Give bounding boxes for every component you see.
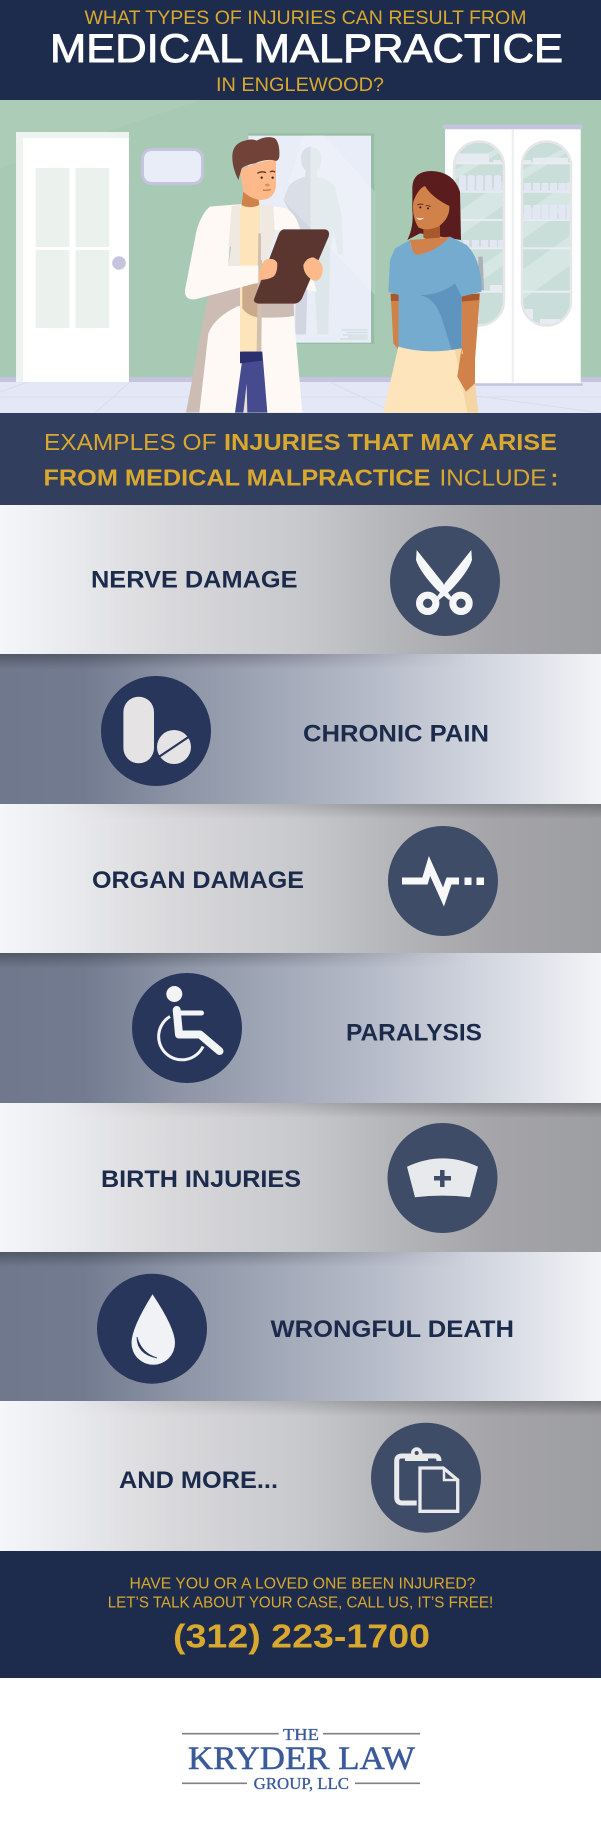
banner text line 1: EXAMPLES OF: [44, 429, 216, 455]
label: BIRTH INJURIES: [101, 1166, 301, 1193]
icon: clipboard and document: [371, 1423, 481, 1533]
anatomy poster: [248, 133, 375, 344]
row: paralysis: [0, 953, 601, 1103]
row: wrongful death: [0, 1252, 601, 1401]
logo: the kryder law group: KRYDER LAW: [188, 1741, 416, 1777]
row: chronic pain: [0, 654, 601, 804]
icon: pills: [101, 676, 211, 786]
baseboard: [0, 377, 601, 382]
banner text line 1: [44, 429, 557, 455]
row: nerve damage: [0, 505, 601, 654]
row: and more: [0, 1401, 601, 1551]
icon: scissors: [390, 526, 500, 636]
title: medical malpractice: MEDICAL MALPRACTICE: [50, 27, 563, 71]
label: WRONGFUL DEATH: [270, 1316, 514, 1343]
call to action line 1: HAVE YOU OR A LOVED ONE BEEN INJURED?: [130, 1575, 476, 1592]
wall: [0, 100, 601, 377]
icon: wheelchair: [132, 973, 242, 1083]
label: NERVE DAMAGE: [91, 567, 298, 594]
label: CHRONIC PAIN: [303, 721, 489, 748]
logo: the kryder law group: GROUP, LLC: [254, 1774, 349, 1793]
banner text line 2: :: [550, 464, 558, 490]
row: organ damage: [0, 804, 601, 953]
illustration: doctor and patient in clinic room: [0, 100, 601, 413]
call to action line 2: LET’S TALK ABOUT YOUR CASE, CALL US, IT’S FREE!: [108, 1594, 493, 1611]
icon: nurse cap: [388, 1123, 498, 1233]
label: PARALYSIS: [346, 1020, 482, 1047]
logo: the kryder law group: THE: [283, 1725, 319, 1744]
icon: heartbeat: [388, 826, 498, 936]
door: [16, 132, 129, 382]
label: AND MORE...: [119, 1467, 278, 1494]
icon: blood drop: [97, 1274, 207, 1384]
banner text line 2: FROM MEDICAL MALPRACTICE: [44, 464, 430, 490]
logo: the kryder law group: [182, 1725, 420, 1793]
label: ORGAN DAMAGE: [92, 867, 304, 894]
banner text line 2: INCLUDE: [440, 464, 546, 490]
heading: what types of injuries: WHAT TYPES OF INJURIES CAN RESULT FROM: [84, 7, 526, 29]
wall sign: [142, 150, 202, 184]
header panel: [0, 0, 601, 100]
floor: [0, 382, 601, 413]
phone number: (312) 223-1700: [173, 1617, 430, 1654]
patient: [383, 171, 484, 413]
medicine cabinet: [443, 125, 583, 386]
heading: in englewood: IN ENGLEWOOD?: [216, 74, 384, 96]
doctor: [185, 137, 329, 413]
banner text line 1: INJURIES THAT MAY ARISE: [224, 429, 557, 455]
row: birth injuries: [0, 1103, 601, 1252]
footer call to action panel: [0, 1551, 601, 1678]
banner text line 2: [44, 464, 558, 490]
banner panel: [0, 413, 601, 505]
